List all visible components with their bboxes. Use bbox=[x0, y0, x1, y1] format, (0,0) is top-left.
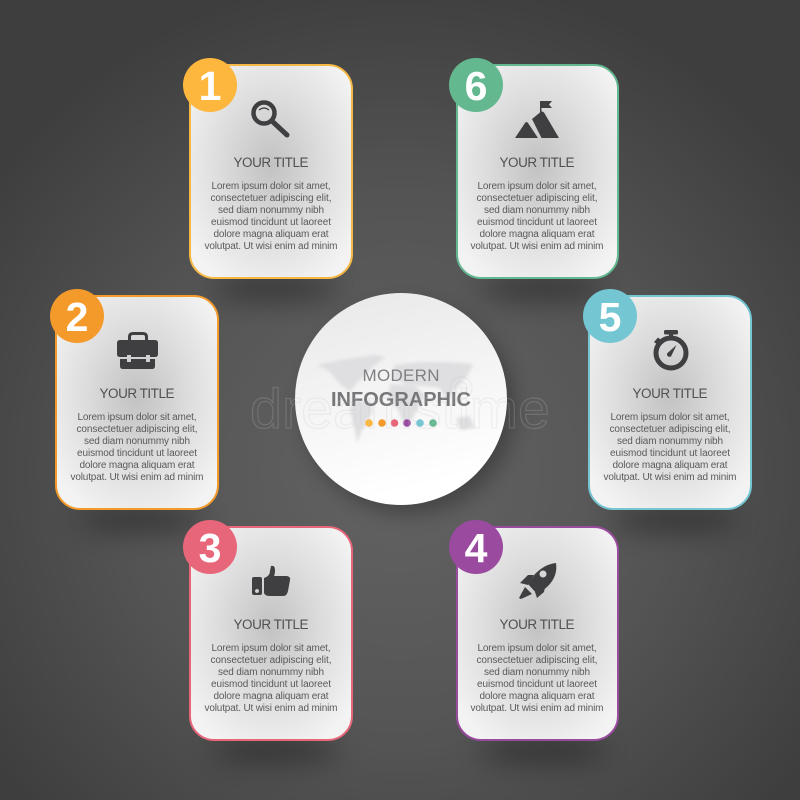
title: YOUR TITLE bbox=[100, 386, 174, 401]
text block: dolore magna aliquam erat bbox=[214, 691, 329, 702]
text block: sed diam nonummy nibh bbox=[218, 205, 324, 216]
badge: 2: 2 bbox=[66, 294, 88, 340]
text block: euismod tincidunt ut laoreet bbox=[77, 448, 197, 459]
text block: consectetuer adipiscing elit, bbox=[76, 424, 198, 435]
title: YOUR TITLE bbox=[500, 155, 574, 170]
badge: 4 bbox=[449, 520, 503, 574]
title: YOUR TITLE bbox=[234, 617, 308, 632]
panel: step 5 bbox=[583, 289, 751, 530]
text block bbox=[204, 643, 338, 714]
text block bbox=[70, 412, 204, 483]
text block bbox=[470, 181, 604, 252]
text block: dolore magna aliquam erat bbox=[612, 460, 728, 471]
text block: sed diam nonummy nibh bbox=[84, 436, 190, 447]
badge: 5: 5 bbox=[599, 294, 621, 340]
panel: step 4 bbox=[449, 520, 618, 761]
text block: euismod tincidunt ut laoreet bbox=[477, 679, 597, 690]
text block: volutpat. Ut wisi enim ad minim bbox=[204, 241, 338, 252]
badge: 1 bbox=[183, 58, 237, 112]
text block bbox=[470, 643, 604, 714]
watermark: dreamstime bbox=[250, 377, 550, 440]
text block: volutpat. Ut wisi enim ad minim bbox=[604, 472, 736, 483]
icon: thumbs up bbox=[252, 566, 290, 596]
badge: 1: 1 bbox=[199, 63, 221, 109]
text block: euismod tincidunt ut laoreet bbox=[211, 217, 331, 228]
text block: volutpat. Ut wisi enim ad minim bbox=[204, 703, 338, 714]
text block: Lorem ipsum dolor sit amet, bbox=[78, 412, 196, 423]
panel: step 1 bbox=[183, 58, 352, 299]
color dots bbox=[365, 419, 437, 427]
text block: sed diam nonummy nibh bbox=[484, 205, 590, 216]
text block: euismod tincidunt ut laoreet bbox=[477, 217, 597, 228]
badge: 2 bbox=[50, 289, 104, 343]
badge: 3: 3 bbox=[199, 525, 221, 571]
title: YOUR TITLE bbox=[500, 617, 574, 632]
text block: sed diam nonummy nibh bbox=[617, 436, 723, 447]
title: YOUR TITLE bbox=[632, 386, 708, 401]
heading: MODERN bbox=[362, 366, 440, 385]
heading: INFOGRAPHIC bbox=[331, 389, 471, 411]
text block: volutpat. Ut wisi enim ad minim bbox=[70, 472, 204, 483]
text block: euismod tincidunt ut laoreet bbox=[211, 679, 331, 690]
badge: 3 bbox=[183, 520, 237, 574]
badge: 6: 6 bbox=[465, 63, 487, 109]
text block: Lorem ipsum dolor sit amet, bbox=[610, 412, 730, 423]
text block: euismod tincidunt ut laoreet bbox=[610, 448, 730, 459]
panel: step 2 bbox=[50, 289, 218, 530]
text block: sed diam nonummy nibh bbox=[218, 667, 324, 678]
icon: world map bbox=[317, 355, 475, 443]
icon: magnifying glass bbox=[254, 102, 287, 135]
text block: sed diam nonummy nibh bbox=[484, 667, 590, 678]
badge: 6 bbox=[449, 58, 503, 112]
text block: dolore magna aliquam erat bbox=[214, 229, 329, 240]
badge: 4: 4 bbox=[465, 525, 488, 571]
text block: Lorem ipsum dolor sit amet, bbox=[478, 643, 596, 654]
panel: step 6 bbox=[449, 58, 618, 299]
text block: consectetuer adipiscing elit, bbox=[476, 655, 598, 666]
title: YOUR TITLE bbox=[234, 155, 308, 170]
text block: volutpat. Ut wisi enim ad minim bbox=[470, 241, 604, 252]
text block: dolore magna aliquam erat bbox=[480, 229, 595, 240]
text block: Lorem ipsum dolor sit amet, bbox=[478, 181, 596, 192]
text block bbox=[204, 181, 338, 252]
text block bbox=[604, 412, 736, 483]
badge: 5 bbox=[583, 289, 637, 343]
text block: Lorem ipsum dolor sit amet, bbox=[212, 181, 330, 192]
panel: center circle bbox=[295, 293, 515, 515]
text block: consectetuer adipiscing elit, bbox=[210, 193, 332, 204]
text block: consectetuer adipiscing elit, bbox=[210, 655, 332, 666]
icon: stopwatch bbox=[654, 330, 686, 368]
icon: rocket bbox=[519, 563, 556, 599]
text block: dolore magna aliquam erat bbox=[480, 691, 595, 702]
text block: volutpat. Ut wisi enim ad minim bbox=[470, 703, 604, 714]
panel: step 3 bbox=[183, 520, 352, 761]
text block: consectetuer adipiscing elit, bbox=[610, 424, 730, 435]
icon: briefcase bbox=[117, 332, 158, 369]
text block: Lorem ipsum dolor sit amet, bbox=[212, 643, 330, 654]
text block: dolore magna aliquam erat bbox=[80, 460, 195, 471]
icon: mountain with flag bbox=[515, 101, 559, 138]
text block: consectetuer adipiscing elit, bbox=[476, 193, 598, 204]
